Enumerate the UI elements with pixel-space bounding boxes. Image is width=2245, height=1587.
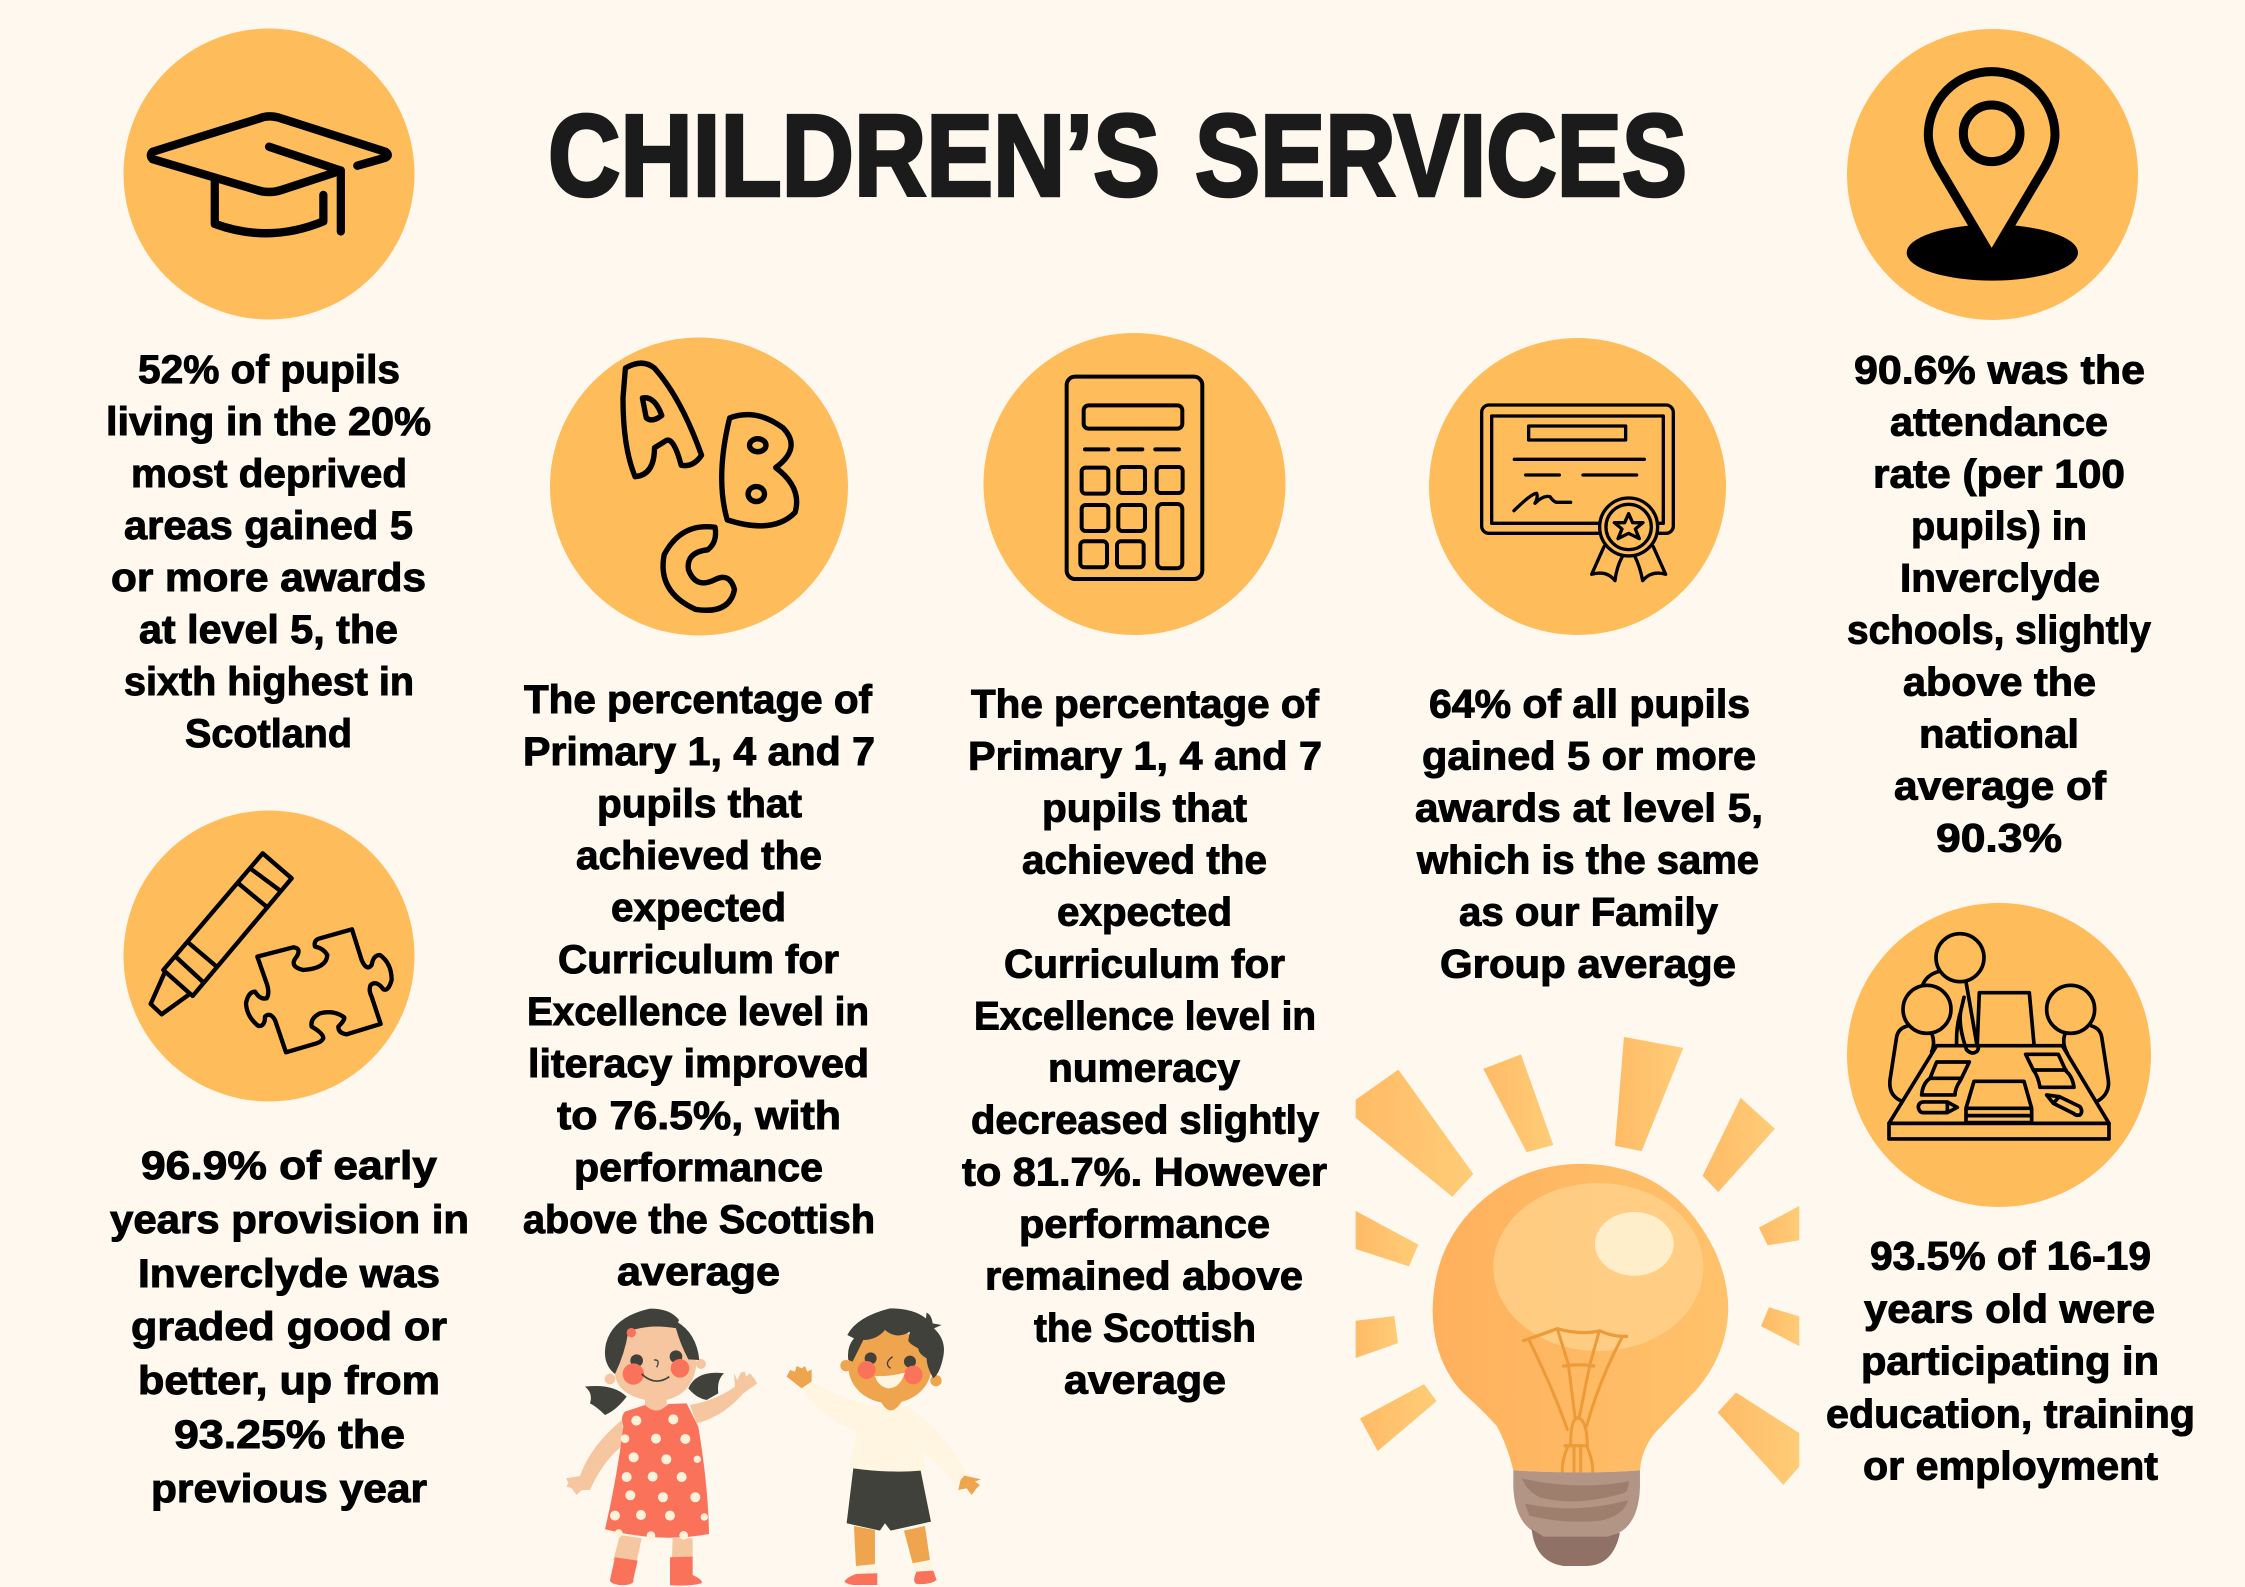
icon: location pin	[1847, 29, 2138, 320]
title: SERVICES	[1195, 90, 1687, 220]
text: 64% of all pupils: Group average	[1440, 942, 1736, 986]
text: numeracy: Curriculum for	[1004, 942, 1285, 986]
text: numeracy: to 81.7%. However	[962, 1150, 1327, 1194]
text: 96.9% of early years: 93.25% the	[174, 1413, 405, 1457]
text: numeracy: pupils that	[1042, 786, 1247, 830]
text: 52% of pupils: Scotland	[185, 712, 352, 756]
illustration: light bulb	[1356, 1037, 1799, 1566]
boy	[787, 1308, 981, 1585]
text: 90.6% attendance: 90.3%	[1936, 816, 2062, 860]
text: 93.5% of 16-19: education, training	[1826, 1392, 2195, 1436]
text: 96.9% of early years: 96.9% of early	[141, 1144, 438, 1188]
text: numeracy: Excellence level in	[974, 994, 1316, 1038]
text: 90.6% attendance: 90.6% was the	[1854, 348, 2145, 392]
text: numeracy: numeracy	[1048, 1046, 1241, 1090]
text: 96.9% of early years: better, up from	[138, 1359, 440, 1403]
text: 52% of pupils	[106, 348, 431, 756]
text: literacy: performance	[574, 1146, 823, 1190]
text: 52% of pupils: living in the 20%	[106, 400, 431, 444]
text: literacy: Primary 1, 4 and 7	[523, 730, 875, 774]
icon: group around a table	[1847, 903, 2151, 1207]
text: literacy: Excellence level in	[527, 990, 869, 1034]
text: 96.9% of early years: previous year	[151, 1467, 427, 1511]
text: 64% of all pupils: gained 5 or more	[1422, 734, 1756, 778]
girl	[566, 1309, 757, 1586]
text: literacy: to 76.5%, with	[557, 1094, 841, 1138]
title	[548, 90, 1687, 220]
text: numeracy: achieved the	[1022, 838, 1267, 882]
text: numeracy: the Scottish	[1034, 1306, 1256, 1350]
text: 93.5% of 16-19: participating in	[1861, 1340, 2159, 1384]
text: numeracy: performance	[1019, 1202, 1270, 1246]
text: 64% of all pupils: as our Family	[1459, 890, 1719, 934]
illustration: two children waving	[566, 1308, 981, 1586]
text: 90.6% attendance: attendance	[1890, 400, 2108, 444]
text: numeracy: average	[1064, 1358, 1226, 1402]
icon: ABC letters	[550, 338, 848, 636]
text: 90.6% attendance: pupils) in	[1911, 504, 2087, 548]
text: 90.6% attendance: schools, slightly	[1847, 608, 2152, 652]
text: 90.6% attendance: Inverclyde	[1900, 556, 2100, 600]
text: numeracy: decreased slightly	[971, 1098, 1320, 1142]
text: 96.9% of early years: graded good or	[131, 1305, 447, 1349]
text: numeracy	[962, 682, 1327, 1402]
text: 93.5% of 16-19: years old were	[1864, 1288, 2155, 1332]
text: 93.5% of 16-19	[1826, 1234, 2195, 1488]
text: 93.5% of 16-19: 93.5% of 16-19	[1870, 1234, 2151, 1278]
icon: certificate	[1429, 338, 1726, 635]
text: numeracy: remained above	[985, 1254, 1303, 1298]
text: 52% of pupils: sixth highest in	[124, 660, 414, 704]
icon: calculator	[984, 333, 1286, 635]
text: 90.6% attendance	[1847, 348, 2152, 860]
text: 52% of pupils: most deprived	[131, 452, 407, 496]
title: CHILDREN’S	[548, 90, 1160, 220]
text: literacy: The percentage of	[524, 678, 873, 722]
text: 64% of all pupils	[1415, 682, 1763, 986]
text: 52% of pupils: 52% of pupils	[138, 348, 400, 392]
text: literacy: expected	[611, 886, 786, 930]
icon: graduation cap	[124, 28, 414, 320]
text: 52% of pupils: at level 5, the	[139, 608, 398, 652]
text: numeracy: Primary 1, 4 and 7	[968, 734, 1322, 778]
text: 52% of pupils: areas gained 5	[124, 504, 413, 548]
text: 96.9% of early years: years provision in	[110, 1198, 469, 1242]
text: 96.9% of early years: Inverclyde was	[138, 1252, 440, 1296]
text: literacy: pupils that	[597, 782, 802, 826]
text: 64% of all pupils: awards at level 5,	[1415, 786, 1763, 830]
text: 90.6% attendance: national	[1919, 712, 2079, 756]
text: literacy: achieved the	[576, 834, 822, 878]
icon: crayon and puzzle piece	[124, 810, 414, 1102]
text: literacy	[523, 678, 875, 1294]
text: numeracy: The percentage of	[971, 682, 1320, 726]
text: 52% of pupils: or more awards	[111, 556, 426, 600]
text: literacy: literacy improved	[528, 1042, 869, 1086]
text: 64% of all pupils: 64% of all pupils	[1429, 682, 1750, 726]
text: 96.9% of early years	[110, 1144, 469, 1511]
text: 93.5% of 16-19: or employment	[1863, 1444, 2158, 1488]
text: literacy: Curriculum for	[558, 938, 839, 982]
text: 64% of all pupils: which is the same	[1416, 838, 1759, 882]
text: literacy: average	[617, 1250, 780, 1294]
text: 90.6% attendance: above the	[1903, 660, 2096, 704]
text: 90.6% attendance: rate (per 100	[1873, 452, 2125, 496]
text: numeracy: expected	[1057, 890, 1232, 934]
text: literacy: above the Scottish	[523, 1198, 875, 1242]
text: 90.6% attendance: average of	[1894, 764, 2107, 808]
